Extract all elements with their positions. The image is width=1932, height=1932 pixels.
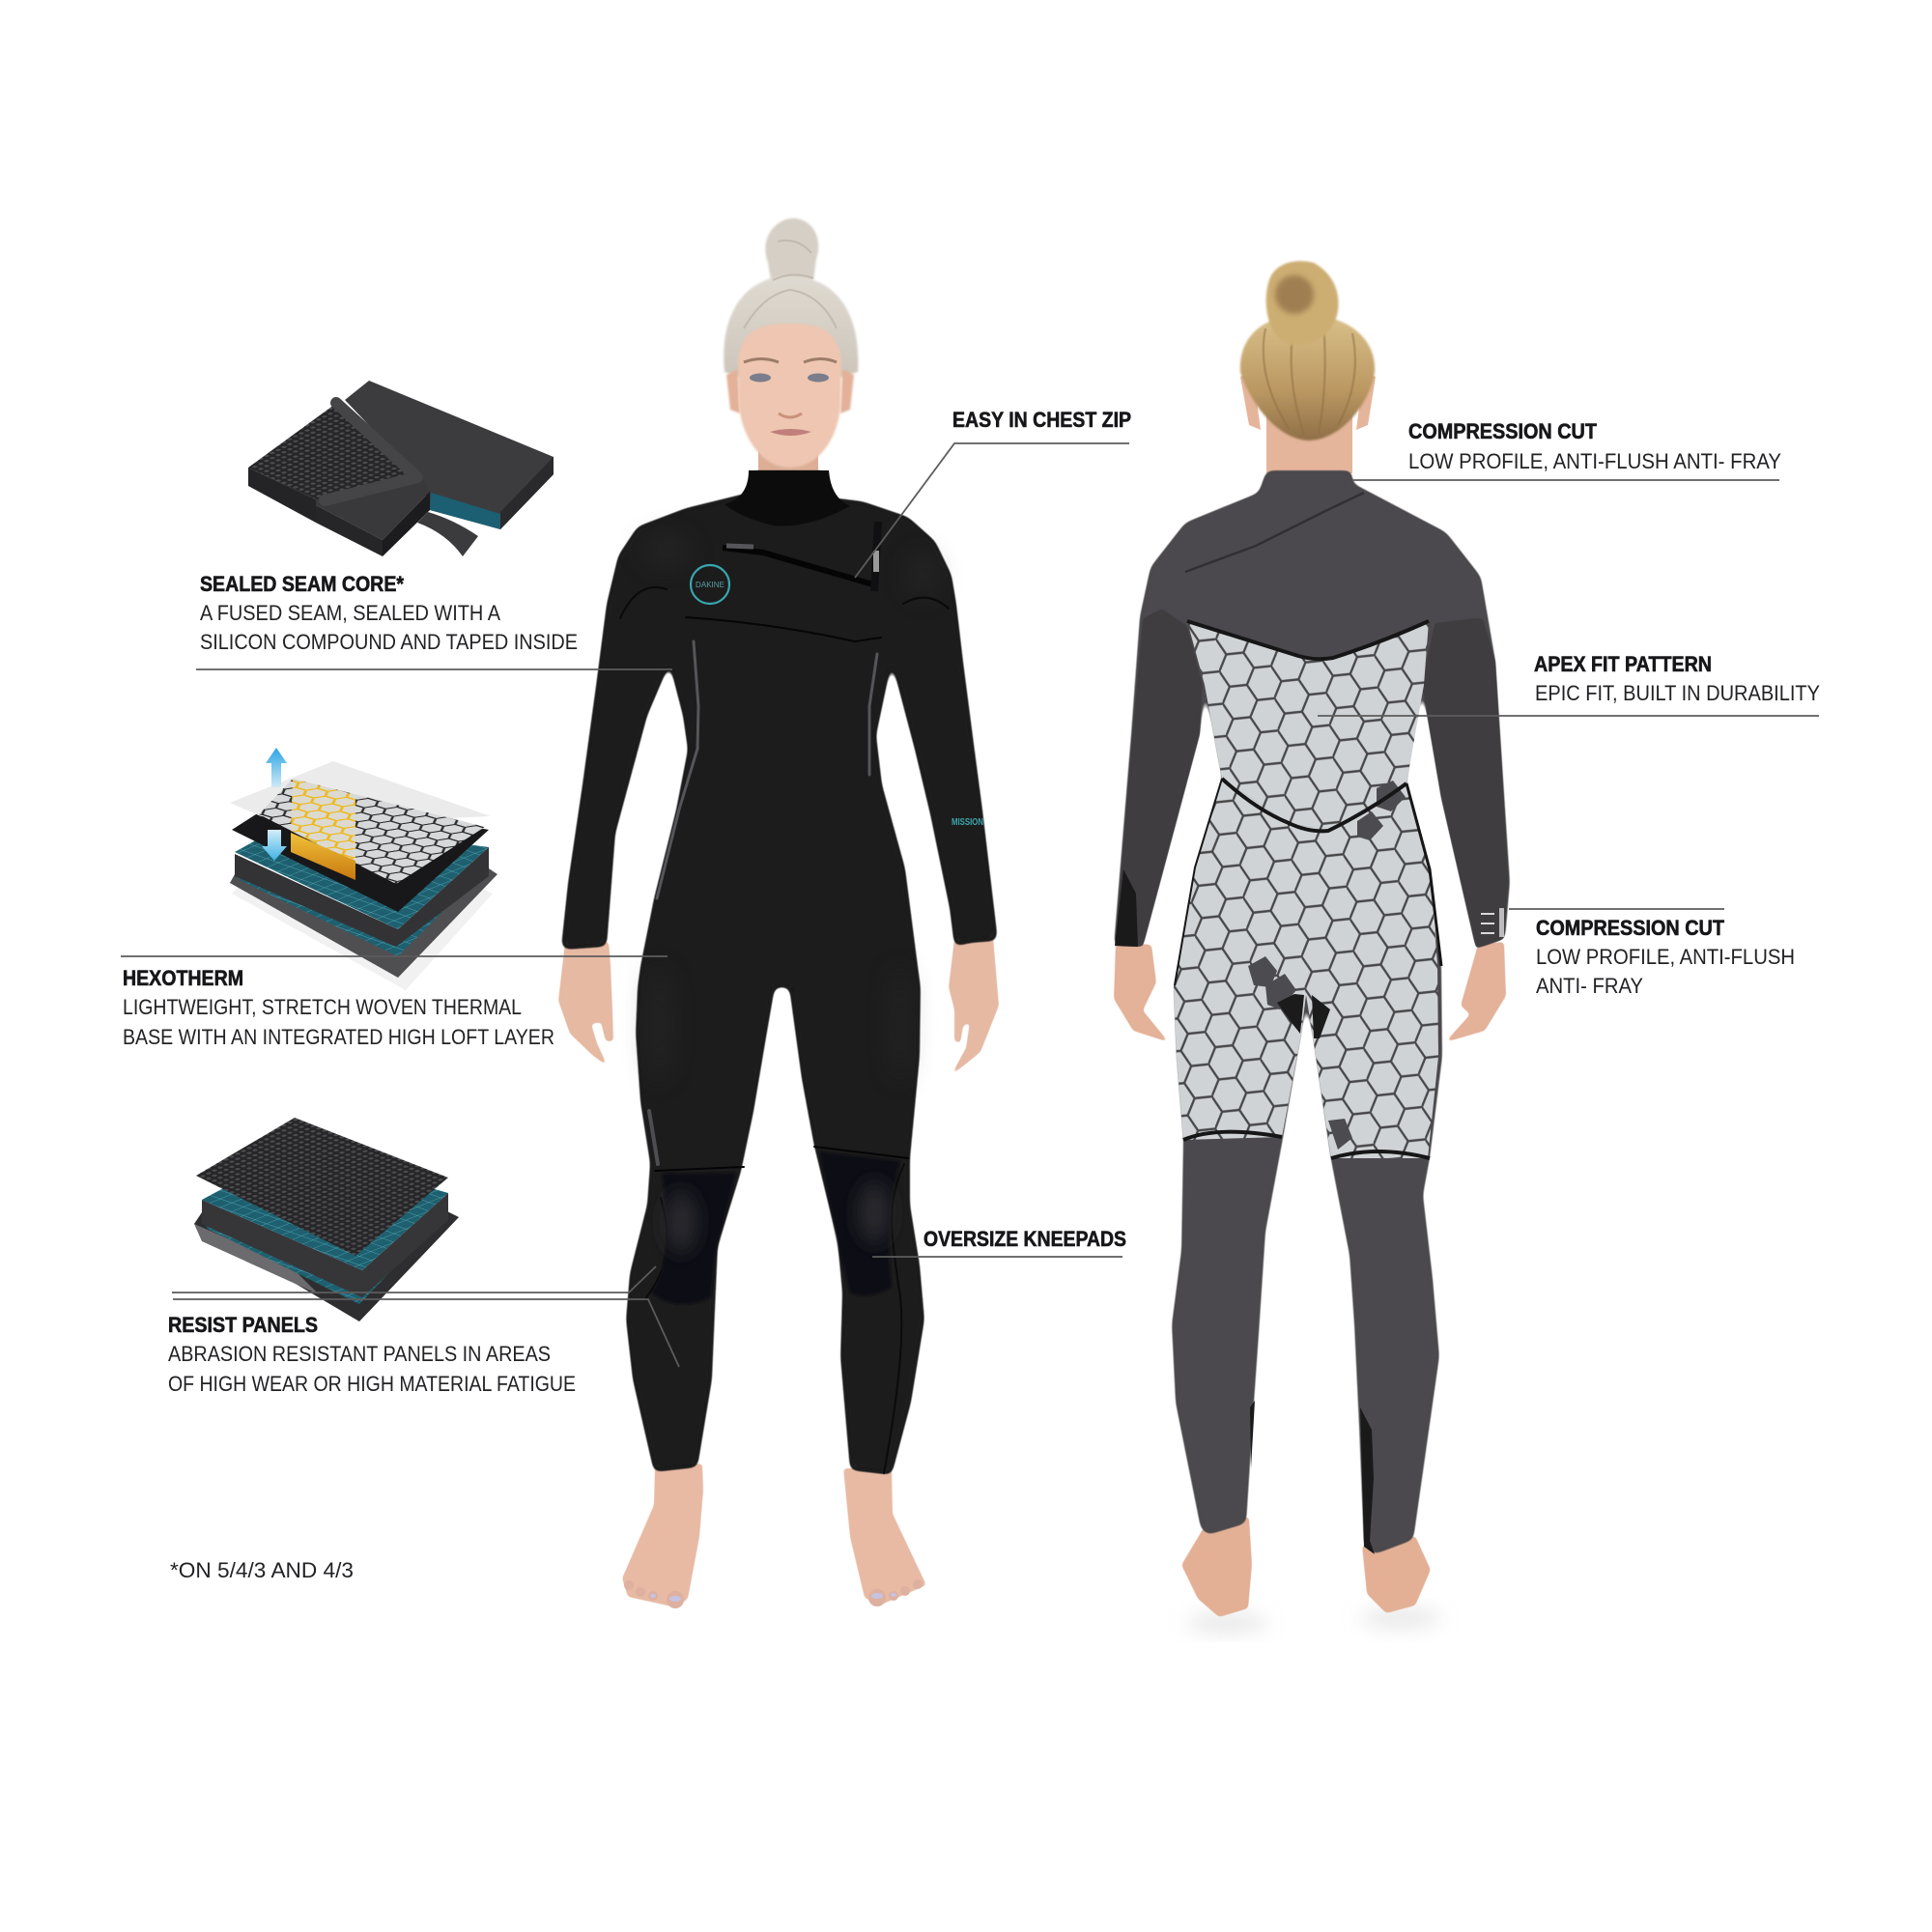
hexotherm sample: hex layer (259, 779, 485, 884)
hexotherm sample: down arrow (262, 830, 287, 861)
callout: apex fit pattern: APEX FIT PATTERN (1534, 652, 1712, 676)
back figure: hands (1114, 942, 1506, 1042)
callout: resist panels: OF HIGH WEAR OR HIGH MATERIAL FATIGUE (168, 1372, 576, 1396)
front figure: kneepads (651, 1151, 900, 1304)
hexotherm sample: faint hex base (232, 884, 493, 990)
hexotherm sample: heat zone orange (291, 833, 355, 880)
back figure: darker sleeves (1115, 609, 1509, 949)
front figure: chest zip (723, 522, 879, 591)
front figure: toes and nails (624, 1579, 923, 1608)
back figure: hair strands (1264, 321, 1355, 435)
front figure: neck (758, 449, 818, 483)
leader line: kneepads (872, 1256, 1122, 1258)
callout: resist panels: ABRASION RESISTANT PANELS IN AREAS (168, 1342, 551, 1366)
sample: resist panel layers (194, 1118, 459, 1321)
hexotherm sample: faint top hex layer (230, 761, 491, 821)
front figure in black wetsuit (558, 218, 999, 1608)
front figure: feet (622, 1463, 926, 1607)
callout: oversize kneepads: OVERSIZE KNEEPADS (923, 1227, 1126, 1251)
hexotherm sample: heat zone yellow hex (291, 779, 355, 864)
callout: sealed seam core: SEALED SEAM CORE* (200, 572, 404, 596)
hexotherm sample: grey bottom layer (230, 865, 497, 978)
resist sample: bottom teal strip (202, 1215, 444, 1304)
front figure: ears (726, 369, 854, 413)
front figure: chest panel seams and side seams (620, 587, 949, 1473)
back figure: sleeve label (1481, 908, 1504, 937)
back figure: bonded seam lines (1175, 621, 1441, 1158)
back figure: wetsuit body (1114, 470, 1510, 1554)
sample: hexotherm layers (230, 748, 497, 990)
callout: hexotherm: LIGHTWEIGHT, STRETCH WOVEN THERMAL (123, 995, 522, 1019)
callout: resist panels: RESIST PANELS (168, 1313, 318, 1337)
leader line: chest zip (855, 443, 1129, 578)
callout: compression cut wrist: ANTI- FRAY (1536, 974, 1643, 998)
seam sample: tape strip (417, 512, 478, 556)
hexotherm sample: black layer (232, 792, 489, 912)
leader line: neck (1352, 479, 1779, 481)
hexotherm sample: foam block side (235, 847, 489, 947)
front figure: wetsuit body (561, 470, 997, 1475)
seam sample: front block (316, 477, 430, 540)
callout: compression cut wrist (1509, 909, 1795, 998)
back figure: yoke zip flap line (1185, 493, 1364, 572)
hexotherm sample: bottom teal strip (235, 867, 488, 956)
seam sample: left block top (248, 405, 421, 505)
callout: easy in chest zip (855, 408, 1131, 578)
back figure: dark logo hexagons (1248, 781, 1406, 1150)
resist sample: textured top sheet (196, 1118, 448, 1256)
callout: compression cut neck (1352, 419, 1781, 480)
front figure: teal chest logo: DAKINE (696, 581, 724, 589)
callout: sealed seam core: SILICON COMPOUND AND TAPED INSIDE (200, 630, 578, 654)
front figure: hair (724, 276, 858, 377)
callout: compression cut neck: COMPRESSION CUT (1408, 419, 1597, 443)
callout: sealed seam core: A FUSED SEAM, SEALED WITH A (200, 601, 500, 625)
callout: hexotherm (121, 956, 668, 1049)
back figure in grey wetsuit with hex panels (1114, 261, 1510, 1632)
resist sample: foam block side (202, 1193, 448, 1297)
seam sample: teal cut edge (430, 493, 500, 529)
front figure: eyes, brows, nose and lips (744, 359, 837, 436)
hexotherm sample: foam block teal top (235, 821, 489, 929)
leader line: seam (196, 668, 672, 670)
seam sample: right block (345, 381, 554, 529)
callout: compression cut wrist: LOW PROFILE, ANTI-FLUSH (1536, 945, 1795, 969)
front figure: hair bun (765, 218, 818, 280)
back figure: crotch panel (1277, 994, 1330, 1038)
front figure: hair strands (744, 241, 837, 328)
leader lines: resist panels (172, 1266, 679, 1367)
leader line: apex (1318, 715, 1819, 717)
hexotherm sample: up arrow (266, 748, 287, 787)
callout: sealed seam core (196, 572, 672, 669)
callout: hexotherm: HEXOTHERM (123, 966, 243, 990)
seam sample: sealed seam tube (325, 403, 417, 500)
front figure: teal sleeve label: MISSION (952, 817, 983, 828)
leader line: wrist (1509, 908, 1724, 910)
resist sample: foam block teal top (202, 1150, 448, 1270)
back figure: lower hex panel (1169, 773, 1449, 1164)
callout: compression cut wrist: COMPRESSION CUT (1536, 916, 1724, 940)
back figure: hair (1240, 315, 1375, 440)
back figure: neck and ears (1240, 372, 1376, 473)
callout: apex fit pattern (1318, 652, 1820, 716)
front figure: hands (558, 937, 999, 1076)
back figure: black cuff and calf panels (1115, 869, 1375, 1554)
back figure: hair bun (1266, 261, 1339, 346)
callout: apex fit pattern: EPIC FIT, BUILT IN DURABILITY (1535, 681, 1820, 705)
callout: compression cut neck: LOW PROFILE, ANTI-FLUSH ANTI- FRAY (1408, 449, 1781, 473)
sample: sealed seam block (248, 381, 554, 556)
callout: resist panels (168, 1266, 679, 1396)
front figure: face (738, 324, 841, 468)
front figure: collar and neck seal (724, 470, 850, 526)
front figure: soft highlights on suit (643, 537, 936, 1082)
back figure: bun shading (1275, 275, 1314, 314)
front figure: teal chest logo (691, 565, 729, 604)
resist sample: bottom layer (194, 1208, 459, 1321)
back figure: feet (1181, 1517, 1431, 1617)
leader line: hexotherm (121, 955, 668, 957)
callout: easy in chest zip: EASY IN CHEST ZIP (952, 408, 1131, 432)
footnote: *ON 5/4/3 AND 4/3 (170, 1558, 354, 1582)
back figure: upper hex panel (1183, 618, 1435, 836)
back figure: ground shadow (1186, 1609, 1441, 1632)
seam sample: left block side (248, 468, 316, 523)
callout: hexotherm: BASE WITH AN INTEGRATED HIGH LOFT LAYER (123, 1025, 554, 1049)
